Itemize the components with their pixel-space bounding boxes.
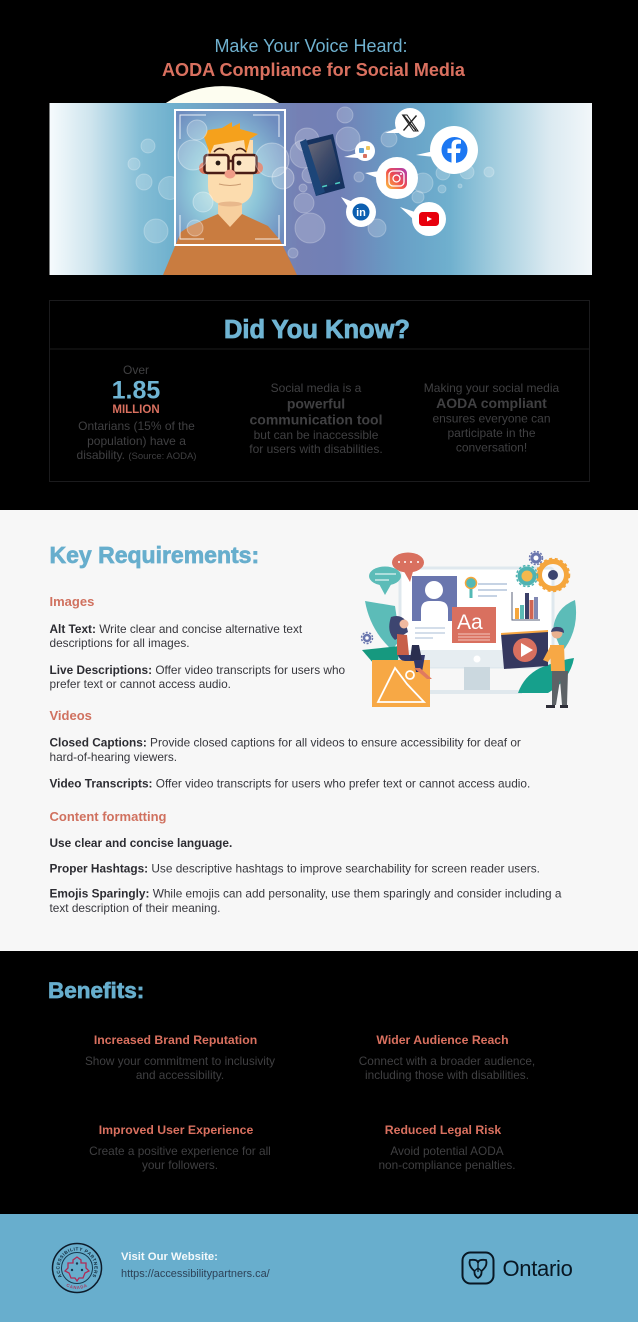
man with card bbox=[543, 627, 568, 708]
title: Make Your Voice Heard: bbox=[214, 36, 408, 56]
stat: 1.85 million bbox=[77, 363, 196, 462]
icon: YouTube bbox=[400, 202, 446, 236]
text block: content formatting: Use clear and concise language. bbox=[50, 836, 232, 850]
text block: content formatting: Content formatting bbox=[50, 809, 167, 824]
hero banner illustration bbox=[50, 86, 592, 275]
fact: communication tool: powerful bbox=[287, 396, 345, 412]
video card bbox=[501, 630, 548, 669]
fact: communication tool: for users with disabilities. bbox=[249, 442, 383, 456]
woman with laptop bbox=[389, 616, 432, 679]
heading: key requirements: Key Requirements: bbox=[50, 542, 259, 568]
text block: videos: hard-of-hearing viewers. bbox=[50, 750, 177, 764]
profile card bbox=[412, 576, 457, 638]
benefit: user experience: your followers. bbox=[142, 1158, 218, 1172]
stat: 1.85 million: 1.85 bbox=[112, 376, 160, 404]
section: key requirements background bbox=[0, 510, 638, 951]
text block: videos bbox=[50, 708, 530, 790]
speech bubbles bbox=[369, 552, 424, 595]
banner gradient bbox=[50, 103, 592, 275]
phone bbox=[300, 134, 345, 196]
social icons bbox=[341, 108, 478, 236]
fact: aoda compliant bbox=[424, 381, 560, 454]
fact: communication tool: Social media is a bbox=[271, 381, 362, 395]
bokeh bubbles bbox=[128, 107, 494, 258]
stat: 1.85 million: MILLION bbox=[112, 404, 160, 416]
fact: aoda compliant: ensures everyone can bbox=[432, 412, 551, 426]
text block: content formatting: Emojis Sparingly: While emojis can add personality, use them sparingly and consider including a bbox=[50, 886, 562, 900]
section: benefits background bbox=[0, 951, 638, 1214]
website link bbox=[121, 1251, 271, 1280]
text block: images bbox=[50, 594, 346, 691]
benefit: user experience bbox=[89, 1123, 271, 1172]
section: footer background bbox=[0, 1214, 638, 1322]
gears bbox=[362, 552, 569, 644]
text block: images: prefer text or cannot access audio. bbox=[50, 677, 231, 691]
text block: images: Images bbox=[50, 594, 94, 609]
icon: X bbox=[385, 108, 425, 138]
text block: images: Live Descriptions: Offer video transcripts for users who bbox=[50, 663, 346, 677]
text block: videos: Video Transcripts: Offer video transcripts for users who prefer text or cannot access audio. bbox=[50, 776, 530, 790]
face frame bbox=[175, 110, 285, 245]
fact: communication tool bbox=[249, 381, 383, 456]
section: top black background bbox=[0, 0, 638, 510]
benefit: legal risk: Reduced Legal Risk bbox=[385, 1123, 501, 1137]
magnifier and text lines bbox=[466, 578, 507, 598]
benefit: legal risk bbox=[378, 1123, 516, 1172]
font card: Aa bbox=[457, 611, 483, 634]
frame lines bbox=[175, 110, 285, 245]
benefit: brand reputation: Increased Brand Reputation bbox=[94, 1033, 257, 1047]
text block: images: descriptions for all images. bbox=[50, 636, 190, 650]
text block: images: Alt Text: Write clear and concise alternative text bbox=[50, 622, 303, 636]
panel: did you know bbox=[50, 300, 590, 482]
benefit: user experience: Create a positive experience for all bbox=[89, 1144, 271, 1158]
fact: aoda compliant: conversation! bbox=[456, 440, 527, 454]
person bbox=[163, 122, 297, 275]
benefit: legal risk: Avoid potential AODA bbox=[390, 1144, 504, 1158]
website link: https://accessibilitypartners.ca/ bbox=[121, 1268, 271, 1280]
logo: accessibility partners bbox=[52, 1242, 102, 1294]
benefit: brand reputation: Show your commitment to inclusivity bbox=[85, 1054, 275, 1068]
logo: ontario: Ontario bbox=[502, 1256, 573, 1281]
benefit: audience reach bbox=[359, 1033, 535, 1082]
text block: content formatting: text description of their meaning. bbox=[50, 901, 220, 915]
website link: Visit Our Website: bbox=[121, 1251, 218, 1263]
icon: Instagram bbox=[365, 157, 418, 199]
heading: benefits: Benefits: bbox=[48, 978, 144, 1003]
fact: communication tool: but can be inaccessible bbox=[254, 428, 379, 442]
benefit: brand reputation: and accessibility. bbox=[136, 1068, 224, 1082]
icon: Facebook bbox=[416, 126, 478, 174]
icon: LinkedIn: in bbox=[356, 207, 366, 219]
logo: ontario bbox=[462, 1252, 573, 1284]
leaves bbox=[365, 601, 400, 650]
logo: accessibility partners: CANADA bbox=[66, 1284, 88, 1290]
stat: 1.85 million: disability. (Source: AODA) bbox=[77, 448, 196, 462]
fact: aoda compliant: Making your social media bbox=[424, 381, 560, 395]
bar chart bbox=[512, 592, 540, 620]
icon: small app bbox=[344, 141, 375, 161]
monitor bbox=[400, 568, 553, 694]
benefit: user experience: Improved User Experience bbox=[99, 1123, 253, 1137]
benefit: legal risk: non-compliance penalties. bbox=[378, 1158, 516, 1172]
logo: accessibility partners: ACCESSIBILITY PARTNERS bbox=[56, 1247, 98, 1278]
illustration: content creators and monitor bbox=[362, 552, 576, 708]
font card bbox=[452, 607, 496, 643]
text block: content formatting: Proper Hashtags: Use descriptive hashtags to improve searchability for screen reader users. bbox=[50, 862, 540, 876]
heading: did you know: Did You Know? bbox=[224, 316, 410, 344]
title: AODA Compliance for Social Media bbox=[162, 60, 466, 80]
fact: communication tool: communication tool bbox=[250, 412, 382, 428]
sun arc bbox=[165, 86, 280, 104]
frame bubbles bbox=[178, 120, 294, 236]
text block: content formatting bbox=[50, 809, 562, 915]
fact: aoda compliant: participate in the bbox=[447, 426, 536, 440]
benefit: brand reputation bbox=[85, 1033, 275, 1082]
benefit: audience reach: Connect with a broader audience, bbox=[359, 1054, 535, 1068]
stat: 1.85 million: Over bbox=[123, 363, 149, 377]
stat: 1.85 million: Ontarians (15% of the bbox=[78, 419, 195, 433]
fact: aoda compliant: AODA compliant bbox=[436, 395, 547, 411]
text block: videos: Closed Captions: Provide closed captions for all videos to ensure accessibility for deaf or bbox=[50, 736, 521, 750]
benefit: audience reach: including those with disabilities. bbox=[365, 1068, 529, 1082]
folder image card bbox=[372, 660, 430, 707]
benefit: audience reach: Wider Audience Reach bbox=[376, 1033, 509, 1047]
text block: videos: Videos bbox=[50, 708, 92, 723]
stat: 1.85 million: population) have a bbox=[87, 434, 186, 448]
title bbox=[162, 36, 466, 80]
